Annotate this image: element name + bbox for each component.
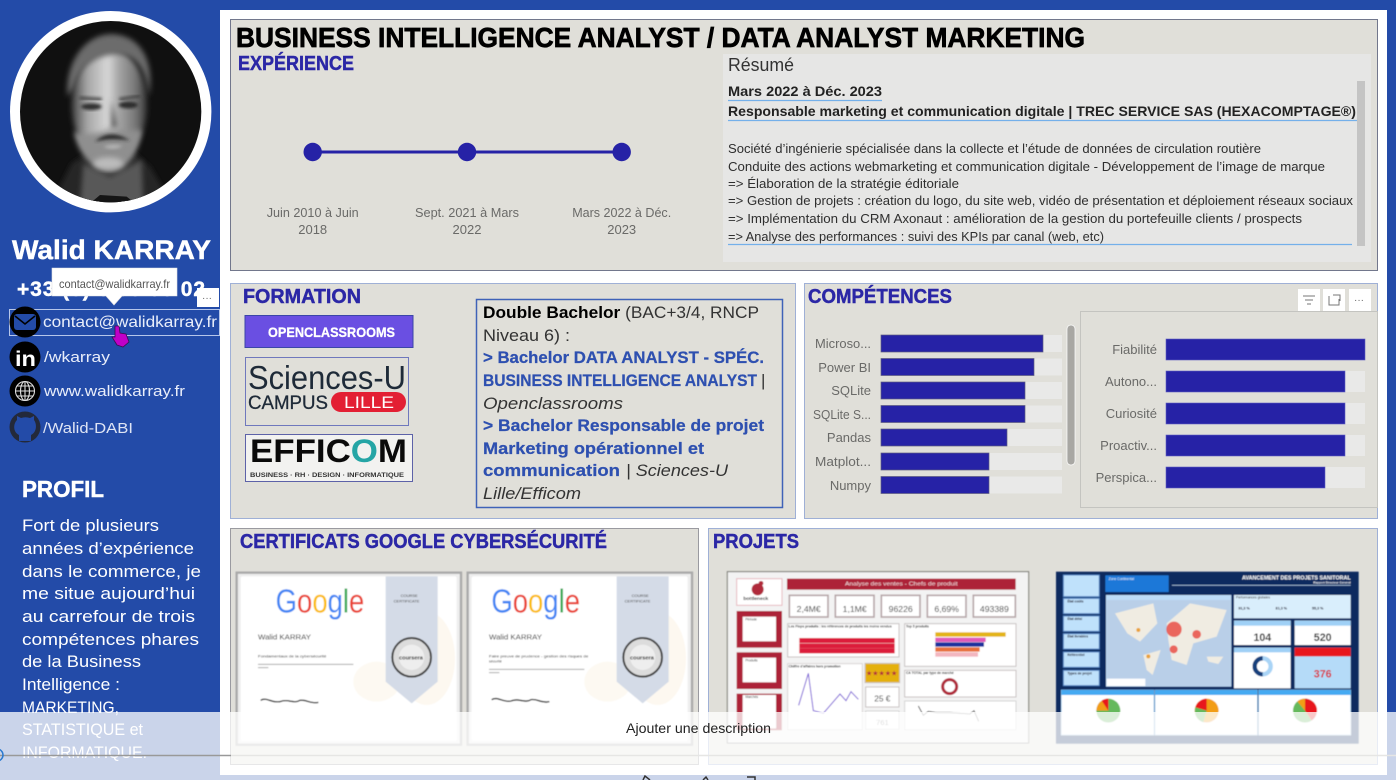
dashboard: sales analysis: 2,4M€ bbox=[797, 604, 821, 614]
dashboard: sanitary projects: État coûts bbox=[1067, 599, 1084, 604]
logo: Efficom: BUSINESS · RH · DESIGN · INFORMATIQUE bbox=[250, 472, 405, 479]
visual toolbar bbox=[1298, 289, 1371, 311]
dashboard: sales analysis: Marchés bbox=[745, 695, 758, 699]
certificate 2: coursera bbox=[630, 655, 655, 661]
logo: Efficom: EFFIC OM bbox=[250, 433, 407, 469]
degree text box: BUSINESS INTELLIGENCE ANALYST bbox=[483, 371, 758, 390]
logo: Sciences-U: Sciences-U bbox=[248, 359, 406, 396]
timeline: 2023 bbox=[607, 222, 636, 237]
dashboard: sanitary projects: Référentiel bbox=[1067, 653, 1085, 657]
summary box: Résumé bbox=[728, 55, 794, 75]
dashboard: sales analysis: Les Flops produits : les références de produits les moins vendus bbox=[789, 624, 892, 628]
degree text box: communication bbox=[483, 461, 620, 480]
certificate 1: CERTIFICATE bbox=[394, 599, 420, 604]
phone: +33 (0) 6 00 00 02 bbox=[17, 278, 205, 301]
profile text: Intelligence : bbox=[22, 675, 120, 694]
contact row: email bbox=[10, 306, 220, 338]
profile text: compétences phares bbox=[22, 630, 199, 649]
dashboard: sales analysis: Période bbox=[745, 618, 757, 622]
panel: experience bbox=[230, 20, 1378, 270]
dashboard: sales analysis: Analyse des ventes - Chefs de produit bbox=[845, 581, 958, 587]
heading: experience: EXPÉRIENCE bbox=[238, 52, 354, 75]
contact row: GitHub bbox=[10, 412, 133, 442]
logo: OpenClassrooms bbox=[245, 316, 413, 348]
contact row: website bbox=[10, 376, 185, 406]
certificate 2: Faire preuve de prudence - gestion des risques de bbox=[489, 654, 588, 658]
heading: formation: FORMATION bbox=[243, 286, 361, 308]
summary box: => Gestion de projets : création du logo, du site web, vidéo de présentation et déploiement réseaux sociaux bbox=[728, 193, 1353, 208]
certificate 1: coursera bbox=[399, 655, 424, 661]
certificate 2: COURSE bbox=[632, 593, 649, 598]
degree text box: > Bachelor Responsable de projet bbox=[483, 416, 764, 435]
degree text box: Lille/Efficom bbox=[483, 484, 581, 503]
tooltip: contact email bbox=[52, 268, 177, 305]
dashboard: sanitary projects: Performances globales bbox=[1236, 596, 1270, 600]
summary box: Conduite des actions webmarketing et communication digitale - Développement de l’image de marque bbox=[728, 159, 1325, 174]
bar chart: technical skills: Power BI bbox=[818, 360, 871, 375]
cursor icon bbox=[112, 326, 129, 347]
certificate 1: Google bbox=[276, 583, 364, 620]
panel: skills bbox=[804, 284, 1378, 518]
dashboard: sanitary projects: 81,3 % bbox=[1276, 606, 1288, 610]
certificate 1 bbox=[237, 573, 461, 745]
dashboard: sanitary projects: 104 bbox=[1253, 632, 1271, 644]
bar chart: technical skills: SQLite S... bbox=[813, 407, 871, 422]
profile text: INFORMATIQUE. bbox=[22, 743, 147, 762]
profile text: de la Business bbox=[22, 652, 141, 671]
bar chart: soft skills bbox=[1080, 312, 1378, 508]
degree text box: Niveau 6) : bbox=[483, 326, 570, 345]
dashboard: sanitary projects: État délai bbox=[1067, 616, 1082, 621]
summary box: Mars 2022 à Déc. 2023 bbox=[728, 83, 882, 99]
panel: certificates bbox=[230, 528, 698, 764]
logo: Sciences-U: LILLE bbox=[344, 393, 394, 412]
heading: skills: COMPÉTENCES bbox=[808, 285, 952, 308]
certificate 1: Walid KARRAY bbox=[258, 635, 311, 642]
timeline: Mars 2022 à Déc. bbox=[572, 205, 671, 220]
dashboard: sanitary projects: AVANCEMENT DES PROJETS SANITORAL bbox=[1242, 575, 1351, 581]
summary box: => Élaboration de la stratégie éditoriale bbox=[728, 176, 959, 191]
timeline: 2022 bbox=[453, 222, 481, 237]
summary box: Responsable marketing et communication digitale | TREC SERVICE SAS (HEXACOMPTAGE®) bbox=[728, 103, 1356, 119]
logo: Sciences-U bbox=[246, 358, 408, 426]
dashboard: sanitary projects: 55,3 % bbox=[1312, 606, 1324, 610]
tooltip: contact email: contact@walidkarray.fr bbox=[59, 277, 170, 291]
summary box: Société d’ingénierie spécialisée dans la collecte et l’étude de données de circulation routière bbox=[728, 141, 1261, 156]
profile text: STATISTIQUE et bbox=[22, 720, 143, 739]
caption overlay bbox=[0, 712, 1396, 780]
certificate 2 bbox=[468, 573, 692, 745]
bar chart: technical skills: Matplot... bbox=[815, 454, 871, 469]
bar chart: soft skills: Proactiv... bbox=[1100, 438, 1157, 453]
degree text box: Double Bachelor (BAC+3/4, RNCP bbox=[483, 303, 759, 322]
dashboard: sanitary projects: État livrables bbox=[1067, 633, 1088, 638]
summary box: => Implémentation du CRM Axonaut : amélioration de la gestion du portefeuille clients / prospects bbox=[728, 211, 1303, 226]
certificate 1: Fondamentaux de la cybersécurité bbox=[258, 654, 326, 658]
certificate 1: COURSE bbox=[401, 593, 418, 598]
summary box bbox=[723, 54, 1371, 262]
contact row: LinkedIn: in bbox=[15, 348, 36, 371]
degree text box: | Sciences-U bbox=[626, 461, 729, 480]
contact row: email: contact@walidkarray.fr bbox=[43, 314, 218, 331]
dashboard: sales analysis bbox=[727, 572, 1029, 743]
dashboard: sanitary projects: Zone Continental bbox=[1109, 577, 1134, 581]
dashboard: sales analysis: Top 5 produits bbox=[906, 624, 929, 628]
contact row: GitHub: /Walid-DABI bbox=[43, 420, 133, 437]
profile text: Fort de plusieurs bbox=[22, 516, 159, 535]
bar chart: soft skills: Fiabilité bbox=[1112, 342, 1157, 357]
dashboard: sales analysis: 1,1M€ bbox=[843, 604, 867, 614]
dashboard: sales analysis: CA TOTAL par type de marché bbox=[906, 671, 954, 675]
degree text box bbox=[476, 300, 782, 508]
profile text: au carrefour de trois bbox=[22, 607, 195, 626]
visual toolbar: ··· bbox=[1354, 295, 1364, 306]
degree text box: Openclassrooms bbox=[483, 394, 624, 413]
certificate 2: Walid KARRAY bbox=[489, 635, 542, 642]
dashboard: sanitary projects: Types de projet bbox=[1067, 671, 1093, 675]
bar chart: technical skills bbox=[813, 325, 1075, 494]
profile heading: PROFIL bbox=[22, 476, 104, 502]
contact row: website: www.walidkarray.fr bbox=[43, 383, 185, 400]
timeline: Sept. 2021 à Mars bbox=[415, 205, 519, 220]
logo: Sciences-U: CAMPUS bbox=[248, 393, 328, 414]
contact row: LinkedIn: /wkarray bbox=[44, 349, 111, 366]
dashboard: sales analysis: 96226 bbox=[889, 604, 913, 614]
bar chart: soft skills: Perspica... bbox=[1096, 470, 1157, 485]
timeline bbox=[267, 143, 671, 237]
bar chart: technical skills: SQLite bbox=[831, 383, 871, 398]
dashboard: sales analysis: 761 bbox=[876, 718, 889, 727]
degree text box: > Bachelor DATA ANALYST - SPÉC. bbox=[483, 348, 764, 367]
bar chart: soft skills: Curiosité bbox=[1106, 406, 1157, 421]
dashboard: sanitary projects: Rapport Directeur Général bbox=[1313, 581, 1351, 585]
dashboard: sales analysis: bottleneck bbox=[743, 596, 768, 602]
heading: projects: PROJETS bbox=[713, 531, 799, 553]
more options button bbox=[197, 288, 219, 307]
caption overlay: Ajouter une description bbox=[626, 720, 771, 736]
certificate 2: sécurité bbox=[489, 659, 502, 663]
certificate 2: CERTIFICATE bbox=[625, 599, 651, 604]
bar chart: soft skills: Autono... bbox=[1105, 374, 1157, 389]
dashboard: sales analysis: 25 € bbox=[874, 694, 891, 704]
name: Walid KARRAY bbox=[12, 235, 211, 265]
timeline: 2018 bbox=[298, 222, 327, 237]
dashboard: sanitary projects bbox=[1056, 572, 1359, 744]
profile photo bbox=[10, 11, 211, 212]
bar chart: technical skills: Microso... bbox=[815, 336, 871, 351]
dashboard: sales analysis: Produits bbox=[745, 659, 758, 663]
logo: Efficom bbox=[246, 433, 412, 482]
dashboard: sales analysis: 493389 bbox=[980, 604, 1009, 614]
degree text box: | bbox=[761, 371, 765, 390]
profile text: dans le commerce, je bbox=[22, 562, 201, 581]
logo: OpenClassrooms: OPENCLASSROOMS bbox=[268, 325, 395, 340]
dashboard: sanitary projects: 520 bbox=[1314, 632, 1332, 644]
profile text bbox=[22, 516, 201, 762]
dashboard: sales analysis: 6,69% bbox=[934, 604, 959, 614]
profile text: MARKETING, bbox=[22, 698, 119, 717]
contact row: LinkedIn bbox=[10, 342, 111, 372]
dashboard: sales analysis: ★★★★★ bbox=[866, 670, 897, 678]
certificate 2: Google bbox=[491, 583, 580, 620]
panel: projects bbox=[708, 528, 1378, 764]
summary box: => Analyse des performances : suivi des KPIs par canal (web, etc) bbox=[728, 229, 1104, 244]
bar chart: technical skills: Numpy bbox=[830, 478, 871, 493]
profile text: années d’expérience bbox=[22, 539, 194, 558]
panel: formation bbox=[230, 284, 796, 518]
dashboard: sales analysis: Chiffre d’affaires hors promotion bbox=[789, 664, 841, 668]
dashboard: sanitary projects: 91,3 % bbox=[1238, 606, 1250, 610]
degree text box: Marketing opérationnel et bbox=[483, 439, 704, 458]
sidebar bbox=[10, 11, 220, 762]
heading: certificates: CERTIFICATS GOOGLE CYBERSÉCURITÉ bbox=[240, 530, 607, 553]
more options button: ··· bbox=[202, 293, 212, 304]
timeline: Juin 2010 à Juin bbox=[267, 205, 359, 220]
title: BUSINESS INTELLIGENCE ANALYST / DATA ANALYST MARKETING bbox=[236, 22, 1085, 53]
bar chart: technical skills: Pandas bbox=[827, 430, 871, 445]
dashboard: sanitary projects: 376 bbox=[1314, 669, 1332, 681]
profile text: me situe aujourd’hui bbox=[22, 584, 195, 603]
